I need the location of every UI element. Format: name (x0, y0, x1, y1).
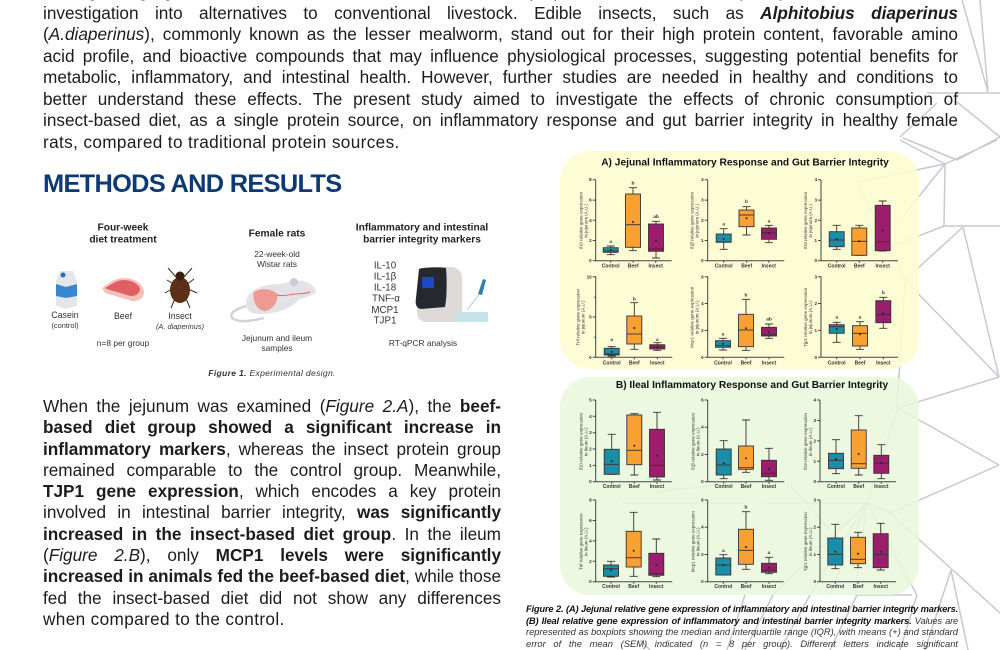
chart: Mcp1 ileum: Insect (762, 584, 777, 590)
chart: Tnf jejunum: in jejunum (A.U.) (581, 300, 586, 334)
rat group: 22-week-old (254, 249, 300, 259)
chart: Il1b ileum: 2 (701, 452, 704, 457)
heading: methods and results: METHODS AND RESULTS (43, 170, 341, 198)
chart: Tnf jejunum: 10 (587, 274, 592, 279)
chart: Il10 ileum: Beef (629, 484, 640, 490)
chart: Il18 ileum: 3 (813, 418, 816, 423)
results paragraph: increased in animals fed the beef-based diet, while those (43, 566, 501, 586)
chart: Il1b jejunum: Il1β relative gene expression (690, 192, 695, 249)
chart: Il10 ileum: 1 (589, 463, 592, 468)
chart: Il1b ileum: in ileum (A.U.) (696, 427, 701, 456)
chart: Mcp1 ileum: 6 (701, 498, 704, 503)
chart: Tjp1 jejunum: Beef (855, 360, 866, 366)
figure 2 caption (526, 604, 958, 649)
chart: Il10 ileum: 4 (589, 414, 592, 419)
chart: Tnf ileum: 8 (589, 498, 592, 503)
chart: Il1b ileum: Beef (741, 484, 752, 490)
chart: Il10 jejunum: Control (602, 264, 620, 270)
intro paragraph: metabolic, inflammatory, and intestinal health. However, further studies are needed in healthy and conditions to (43, 67, 958, 87)
chart: Tjp1 ileum: Insect (873, 584, 888, 590)
chart: Il18 jejunum (803, 177, 898, 270)
chart: Tnf ileum: 0 (589, 579, 592, 584)
chart: Il18 jejunum: in jejunum (A.U.) (808, 203, 813, 237)
chart: Tnf jejunum: 0 (589, 355, 592, 360)
chart: Il1b jejunum: Beef (741, 264, 752, 270)
chart: Il10 jejunum: Beef (628, 264, 639, 270)
chart: Il18 ileum: Beef (853, 484, 864, 490)
results paragraph: fed the insect-based diet did not show any differences (43, 588, 501, 608)
diet treatment group: diet treatment (89, 234, 157, 246)
icon: qPCR machine and pipette (416, 267, 488, 322)
chart: Il1b jejunum (690, 177, 784, 270)
chart: Tnf jejunum: a (656, 338, 659, 343)
chart: Tjp1 ileum: 2 (813, 525, 816, 530)
chart: Il18 jejunum: 1 (814, 238, 817, 243)
intro paragraph: (A.diaperinus), commonly known as the lesser mealworm, stand out for their high protein content, favorable amino (43, 24, 958, 44)
icon: insect (165, 268, 197, 308)
chart: Il10 jejunum: Il10 relative gene expression (579, 192, 584, 249)
chart: Tjp1 jejunum: 0 (814, 355, 817, 360)
panel A title: A) Jejunal Inflammatory Response and Gut Barrier Integrity (601, 158, 889, 168)
chart: Mcp1 ileum: a (768, 551, 771, 556)
chart: Tjp1 jejunum: 3 (814, 274, 817, 279)
marker list: IL-10 (374, 260, 397, 272)
chart: Tnf jejunum: 5 (589, 314, 592, 319)
chart: Il1b jejunum: Insect (761, 264, 776, 270)
chart: Il10 jejunum: 6 (589, 198, 592, 203)
chart: Tnf jejunum: a (610, 338, 613, 343)
chart: Mcp1 jejunum: 4 (701, 301, 704, 306)
icon: rat with intestine (231, 278, 316, 321)
chart: Il10 ileum: Il10 relative gene expression (579, 413, 584, 470)
chart: Mcp1 ileum: in ileum (A.U.) (696, 527, 701, 556)
chart: Tnf jejunum: Control (603, 360, 621, 366)
chart: Tjp1 ileum: 3 (813, 498, 816, 503)
chart: Il18 ileum (803, 398, 896, 490)
results paragraph (43, 396, 501, 629)
diet treatment group: Insect (168, 311, 192, 321)
chart: Il18 ileum: Il18 relative gene expression (803, 413, 808, 470)
chart: Mcp1 ileum: 0 (701, 579, 704, 584)
markers group: RT-qPCR analysis (389, 338, 457, 348)
chart: Tjp1 ileum: 0 (813, 579, 816, 584)
chart: Il10 jejunum (579, 177, 672, 270)
chart: Il1b jejunum: b (745, 199, 748, 205)
chart: Il18 ileum: 4 (813, 398, 816, 403)
chart: Mcp1 ileum: 4 (701, 525, 704, 530)
figure 2 caption: error of the mean (SEM) indicated (n = 8 per group). Different letters indicate significant (526, 639, 958, 649)
chart: Il10 jejunum: Insect (648, 264, 663, 270)
marker list: IL-1β (374, 272, 397, 282)
chart: Tjp1 ileum (803, 498, 896, 590)
chart: Il18 jejunum: Beef (854, 264, 865, 270)
chart: Il1b jejunum: a (768, 220, 771, 224)
markers group: barrier integrity markers (363, 234, 481, 246)
chart: Il1b jejunum: Control (715, 264, 733, 270)
rat group: samples (261, 343, 293, 353)
marker list: TNF-α (372, 294, 400, 304)
icon: beef (102, 278, 144, 301)
chart: Il10 jejunum: 2 (589, 238, 592, 243)
chart: Il1b jejunum: 2 (701, 218, 704, 223)
chart: Tnf jejunum: b (633, 296, 636, 302)
intro paragraph: rats, compared to traditional protein sources. (43, 132, 400, 152)
chart: Tnf ileum: Beef (628, 584, 639, 590)
chart: Tnf ileum (579, 498, 672, 590)
chart: Il10 ileum: 0 (589, 479, 592, 484)
diet treatment group: Casein (51, 310, 79, 320)
chart: Il18 ileum: in ileum (A.U.) (808, 427, 813, 456)
chart: Il18 jejunum: 4 (814, 177, 817, 182)
marker list: IL-18 (374, 282, 397, 294)
chart: Mcp1 jejunum: 6 (701, 274, 704, 279)
chart: Il18 ileum: 2 (813, 438, 816, 443)
chart: Tjp1 ileum: 1 (813, 552, 816, 557)
diet treatment group: n=8 per group (97, 338, 150, 348)
chart: Mcp1 ileum: 2 (701, 552, 704, 557)
chart: Tnf ileum: 6 (589, 518, 592, 523)
intro paragraph: acid profile, and bioactive compounds that may influence physiological processes, suggesting potential benefits for (43, 46, 958, 66)
chart: Il1b ileum: Insect (762, 484, 777, 490)
chart: Tjp1 jejunum: Control (828, 360, 846, 366)
chart: Tnf ileum: Control (602, 584, 620, 590)
chart: Il10 jejunum: 4 (589, 218, 592, 223)
rat group: Jejunum and ileum (242, 333, 312, 343)
results paragraph: remained comparable to the control group. Meanwhile, (43, 460, 501, 480)
diet treatment group: (A. diaperinus) (156, 322, 205, 331)
panel B: ileal (560, 377, 919, 595)
results paragraph: when compared to the control. (43, 609, 285, 629)
results paragraph: (Figure 2.B), only MCP1 levels were significantly (43, 545, 501, 565)
chart: Il10 jejunum: a (609, 240, 612, 245)
chart: Tnf jejunum: Insect (650, 360, 665, 366)
markers group: Inflammatory and intestinal (356, 222, 488, 234)
chart: Mcp1 jejunum: Control (714, 360, 732, 366)
chart: Il1b ileum: 6 (701, 398, 704, 403)
panel A: jejunal (560, 151, 919, 369)
chart: Il18 jejunum: 0 (814, 258, 817, 263)
chart: Il18 jejunum: 2 (814, 218, 817, 223)
chart: Il1b jejunum: 0 (701, 258, 704, 263)
intro paragraph: investigation into alternatives to conventional livestock. Edible insects, such as Alphitobius diaperinus (43, 2, 958, 22)
results paragraph: involved in intestinal barrier integrity, was significantly (43, 502, 501, 522)
results paragraph: increased in the insect-based diet group. In the ileum (43, 524, 501, 544)
chart: Tnf ileum: Tnf relative gene expression (579, 513, 584, 570)
chart: Tjp1 jejunum: Insect (876, 360, 891, 366)
chart: Tjp1 ileum: in ileum (A.U.) (808, 527, 813, 556)
chart: Mcp1 jejunum: 2 (701, 328, 704, 333)
results paragraph: based diet group showed a significant increase in (43, 417, 501, 437)
marker list: TJP1 (374, 316, 396, 326)
chart: Mcp1 jejunum (690, 274, 784, 366)
intro paragraph: insect-based diet, as a single protein source, on inflammatory response and gut barrier integrity in healthy female (43, 110, 958, 130)
chart: Tjp1 ileum: Control (826, 584, 845, 590)
chart: Tnf jejunum: Beef (629, 360, 640, 366)
intro paragraph: better understand these effects. The present study aimed to investigate the effects of chronic consumption of (43, 88, 958, 108)
chart: Il1b ileum: 4 (701, 425, 704, 430)
chart: Il10 ileum: 5 (589, 398, 592, 403)
diet treatment group: Four-week (98, 222, 149, 234)
chart: Mcp1 jejunum: Mcp1 relative gene expression (690, 286, 695, 348)
chart: Mcp1 ileum: Control (714, 584, 733, 590)
chart: Il10 ileum: Insect (650, 484, 665, 490)
chart: Il1b ileum (691, 398, 784, 490)
chart: Il18 jejunum: Il18 relative gene expression (803, 192, 808, 249)
chart: Il10 jejunum: ab (653, 214, 659, 220)
chart: Tnf ileum: 2 (589, 559, 592, 564)
chart: Il10 jejunum: 0 (589, 258, 592, 263)
chart: Tjp1 jejunum (803, 274, 898, 366)
chart: Il18 ileum: 1 (813, 459, 816, 464)
results paragraph: When the jejunum was examined (Figure 2.A), the beef- (43, 396, 501, 416)
rat group: Female rats (249, 228, 306, 240)
chart: Tjp1 ileum: Tjp1 relative gene expression (803, 512, 808, 571)
figure 2 caption: Figure 2. (A) Jejunal relative gene expression of inflammatory and intestinal barrier integrity markers. (526, 604, 958, 614)
diet treatment group: Beef (114, 311, 133, 321)
marker list (371, 260, 400, 326)
chart: Mcp1 jejunum: ab (766, 316, 772, 322)
chart: Il18 jejunum: Control (828, 264, 846, 270)
diet treatment group: (control) (51, 321, 79, 330)
chart: Il1b ileum: Il1β relative gene expression (691, 413, 696, 470)
chart: Il1b jejunum: 3 (701, 198, 704, 203)
chart: Il10 ileum: 2 (589, 447, 592, 452)
chart: Il1b ileum: Control (715, 484, 733, 490)
chart: Tjp1 jejunum: a (859, 316, 862, 320)
results paragraph: TJP1 gene expression, which encodes a key protein (43, 481, 501, 501)
chart: Il18 jejunum: Insect (875, 264, 890, 270)
chart: Tnf ileum: 4 (589, 538, 592, 543)
chart: Tjp1 jejunum: 1 (814, 328, 817, 333)
chart: Il10 ileum (579, 398, 672, 490)
chart: Mcp1 jejunum: 0 (701, 355, 704, 360)
chart: Tnf jejunum (576, 274, 672, 366)
intro paragraph (43, 0, 958, 152)
chart: Il1b jejunum: a (722, 222, 725, 228)
chart: Tjp1 jejunum: Tjp1 relative gene expression (803, 287, 808, 347)
chart: Mcp1 jejunum: b (745, 292, 748, 298)
panel B title: B) Ileal Inflammatory Response and Gut Barrier Integrity (616, 380, 888, 391)
figure 1 caption: Figure 1. Experimental design. (208, 368, 336, 378)
chart: Mcp1 ileum: a (722, 549, 725, 554)
chart: Il1b jejunum: 4 (701, 177, 704, 182)
chart: Il18 ileum: 0 (813, 479, 816, 484)
figure 2 caption: (B) Ileal relative gene expression of inflammatory and intestinal barrier integrity markers. Values are (526, 616, 958, 626)
chart: Mcp1 ileum: b (745, 504, 748, 510)
chart: Tjp1 jejunum: a (835, 316, 838, 320)
chart: Tjp1 jejunum: in jejunum (A.U.) (808, 300, 813, 334)
chart: Mcp1 ileum (691, 498, 784, 590)
chart: Il1b jejunum: 1 (701, 238, 704, 243)
chart: Il10 ileum: 3 (589, 430, 592, 435)
icon: milk carton (56, 271, 77, 309)
chart: Tnf ileum: in ileum (A.U.) (584, 527, 589, 556)
chart: Il1b jejunum: in jejunum (A.U.) (695, 203, 700, 237)
chart: Tjp1 jejunum: b (882, 290, 885, 296)
chart: Il10 jejunum: b (632, 180, 635, 186)
rat group (231, 228, 316, 353)
marker list: MCP1 (371, 305, 399, 316)
chart: Mcp1 jejunum: in jejunum (A.U.) (695, 300, 700, 334)
chart: Tnf jejunum: Tnf relative gene expression (576, 289, 581, 346)
chart: Il18 jejunum: 3 (814, 198, 817, 203)
chart: Mcp1 jejunum: a (722, 332, 725, 338)
chart: Il10 jejunum: 8 (589, 177, 592, 182)
rat group: Wistar rats (257, 259, 297, 269)
results paragraph: inflammatory markers, whereas the insect protein group (43, 439, 501, 459)
chart: Mcp1 ileum: Mcp1 relative gene expression (691, 511, 696, 572)
chart: Il1b ileum: 0 (701, 479, 704, 484)
markers group (356, 222, 488, 348)
chart: Tjp1 ileum: Beef (853, 584, 864, 590)
diet treatment group (51, 222, 205, 348)
chart: Mcp1 ileum: Beef (741, 584, 752, 590)
chart: Mcp1 jejunum: Beef (741, 360, 752, 366)
chart: Tnf ileum: Insect (649, 584, 664, 590)
chart: Il18 ileum: Control (827, 484, 845, 490)
chart: Il10 ileum: in ileum (A.U.) (584, 427, 589, 456)
chart: Il18 ileum: Insect (874, 484, 889, 490)
chart: Il10 jejunum: in jejunum (A.U.) (584, 203, 589, 237)
figure 2 caption: represented as boxplots showing the median and interquartile range (IQR), with means (+) and standard (526, 627, 958, 637)
chart: Il10 ileum: Control (603, 484, 621, 490)
chart: Mcp1 jejunum: Insect (762, 360, 777, 366)
chart: Tjp1 jejunum: 2 (814, 301, 817, 306)
